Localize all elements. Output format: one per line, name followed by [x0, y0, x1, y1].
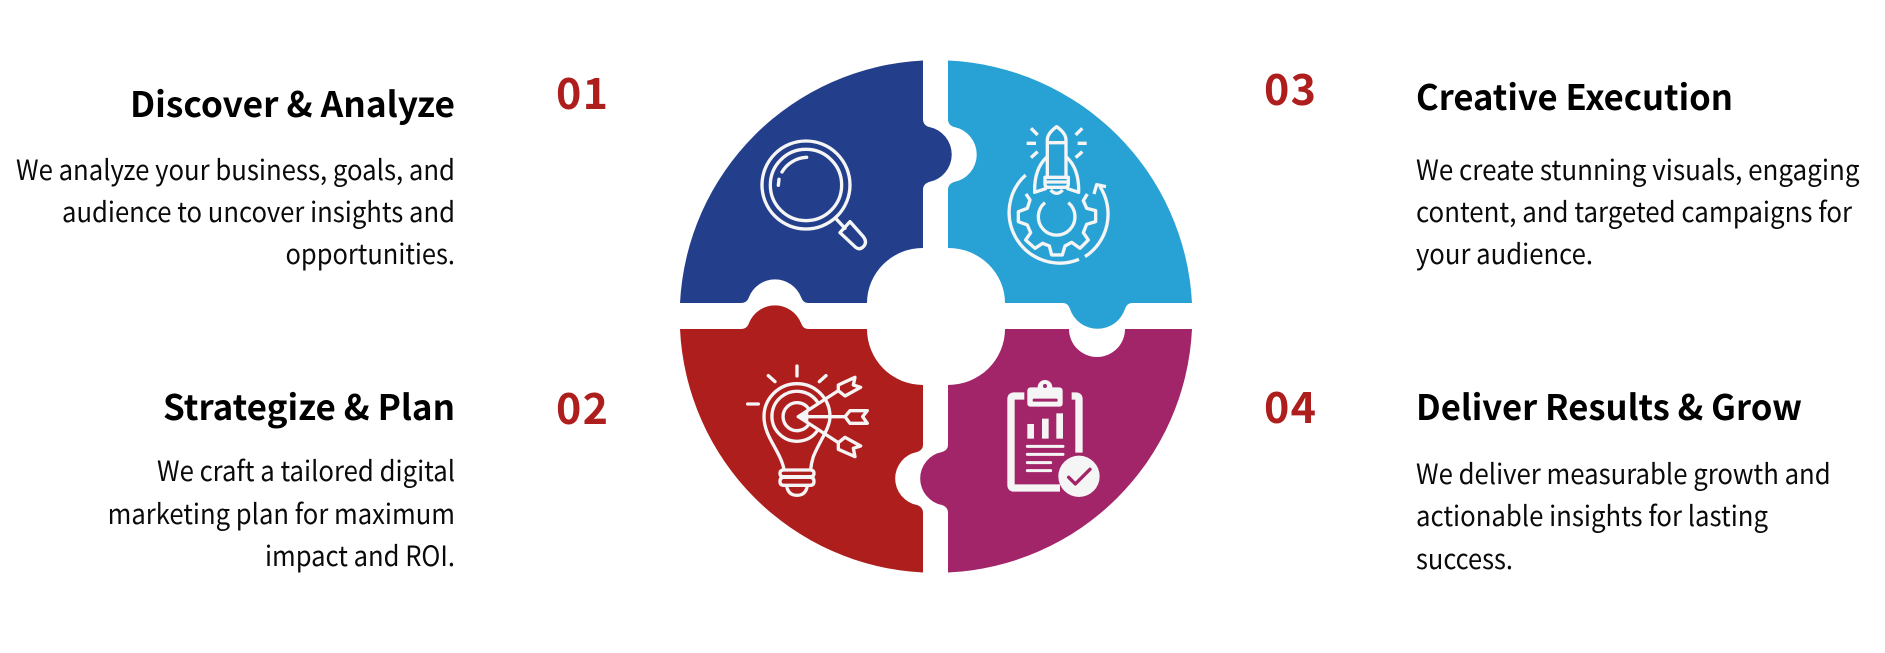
body text 04 [1416, 453, 1831, 578]
body text 03 [1416, 149, 1860, 273]
heading: Creative Execution: Creative Execution [1416, 70, 1733, 121]
body text 01 [16, 149, 455, 273]
heading: Deliver Results & Grow: Deliver Results & Grow [1416, 380, 1802, 431]
puzzle piece: magenta [920, 329, 1192, 572]
body text 02: marketing plan for maximum [108, 493, 455, 533]
body text 03: We create stunning visuals, engaging [1416, 149, 1860, 189]
body text 01: audience to uncover insights and [62, 191, 455, 231]
panel: step 03 text [1264, 56, 1860, 273]
icon: rocket and gear [1009, 127, 1108, 263]
body text 04: actionable insights for lasting [1416, 495, 1768, 535]
icon: magnifying glass [762, 141, 865, 249]
number 02: 02 [556, 375, 608, 437]
heading: Discover & Analyze: Discover & Analyze [130, 77, 455, 128]
number 01: 01 [556, 60, 608, 122]
icon: light bulb with target and arrows [748, 366, 867, 495]
puzzle piece: blue [680, 60, 952, 303]
panel: step 01 text [16, 60, 608, 273]
heading: Strategize & Plan: Strategize & Plan [163, 380, 455, 431]
icon: clipboard with chart and check [1011, 380, 1100, 497]
body text 02: impact and ROI. [265, 535, 455, 575]
body text 03: your audience. [1416, 233, 1593, 273]
panel: step 04 text [1264, 374, 1831, 578]
body text 01: opportunities. [286, 233, 455, 273]
panel: step 02 text [108, 375, 608, 575]
body text 03: content, and targeted campaigns for [1416, 191, 1852, 231]
body text 02 [108, 450, 455, 575]
body text 01: We analyze your business, goals, and [16, 149, 455, 189]
puzzle piece: cyan [948, 60, 1192, 329]
number 03: 03 [1264, 56, 1316, 118]
body text 04: We deliver measurable growth and [1416, 453, 1831, 493]
body text 02: We craft a tailored digital [157, 450, 455, 490]
puzzle piece: red [680, 305, 923, 572]
number 04: 04 [1264, 374, 1316, 436]
body text 04: success. [1416, 538, 1513, 578]
